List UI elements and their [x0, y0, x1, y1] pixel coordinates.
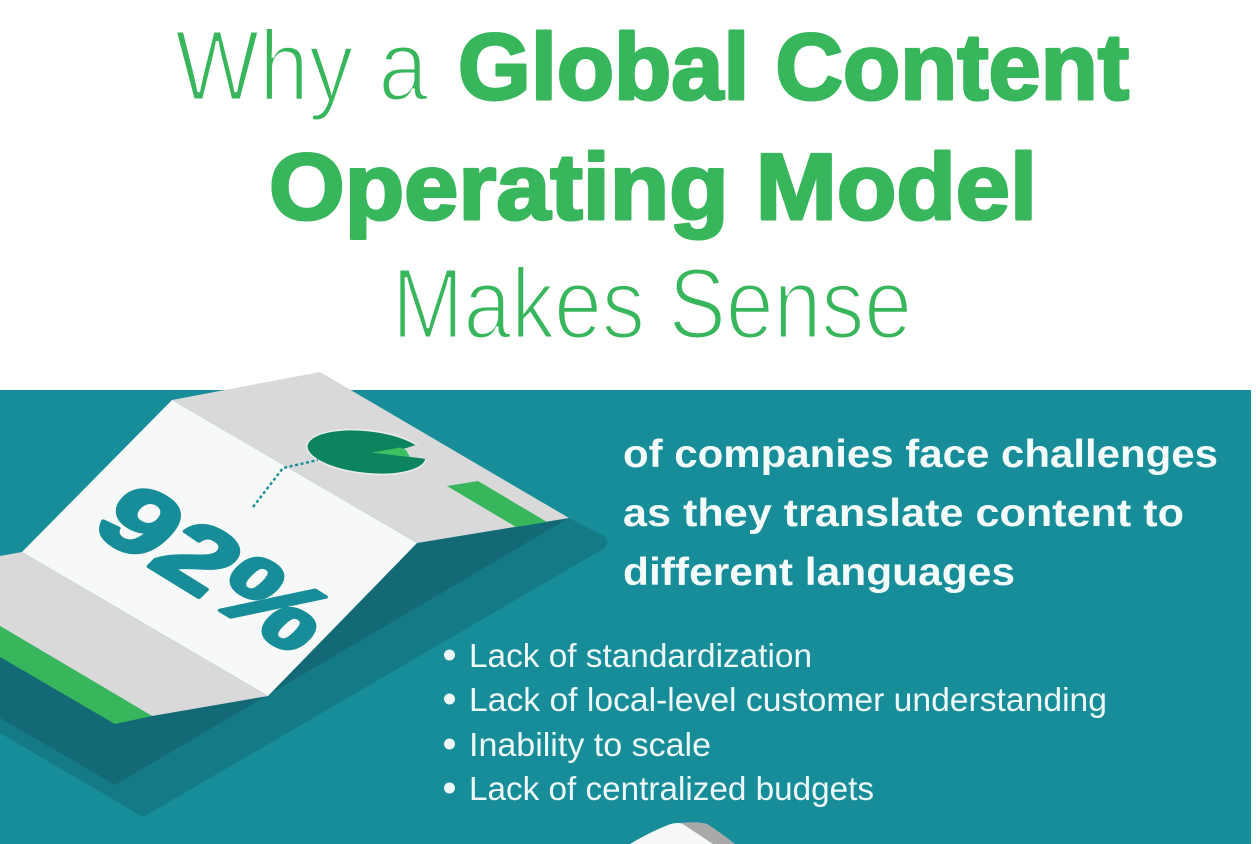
- bullet list: Inability to scale: [469, 726, 711, 763]
- headline text: of companies face challenges: [623, 433, 1218, 476]
- title: Makes Sense: [392, 248, 912, 360]
- bullet list: Lack of local-level customer understanding: [469, 681, 1107, 718]
- headline text: [623, 433, 1218, 594]
- white center fold: [22, 400, 417, 696]
- headline text: as they translate content to: [623, 492, 1184, 535]
- title: Operating Model: [269, 134, 1037, 239]
- inner shadow: [0, 518, 569, 785]
- outer shadow: [0, 518, 607, 817]
- headline text: different languages: [623, 551, 1015, 594]
- dotted connector: [253, 460, 318, 507]
- cropped next illustration at bottom: [630, 822, 735, 844]
- panel: teal background: [0, 390, 1251, 844]
- title: Global Content: [458, 14, 1129, 119]
- pie chart icon: [305, 424, 434, 480]
- title: [175, 10, 1129, 360]
- green strip lower: [0, 626, 152, 724]
- title: Why a: [175, 10, 428, 122]
- illustration: folded paper with 92% statistic: [0, 372, 607, 817]
- lower gray fold: [0, 552, 268, 716]
- green strip upper: [447, 481, 547, 527]
- bullet list: Lack of standardization: [469, 637, 812, 674]
- upper gray fold: [172, 372, 569, 543]
- big number 92%: 92%: [73, 465, 359, 671]
- bullet list: Lack of centralized budgets: [469, 770, 874, 807]
- bullet list: [444, 637, 1107, 807]
